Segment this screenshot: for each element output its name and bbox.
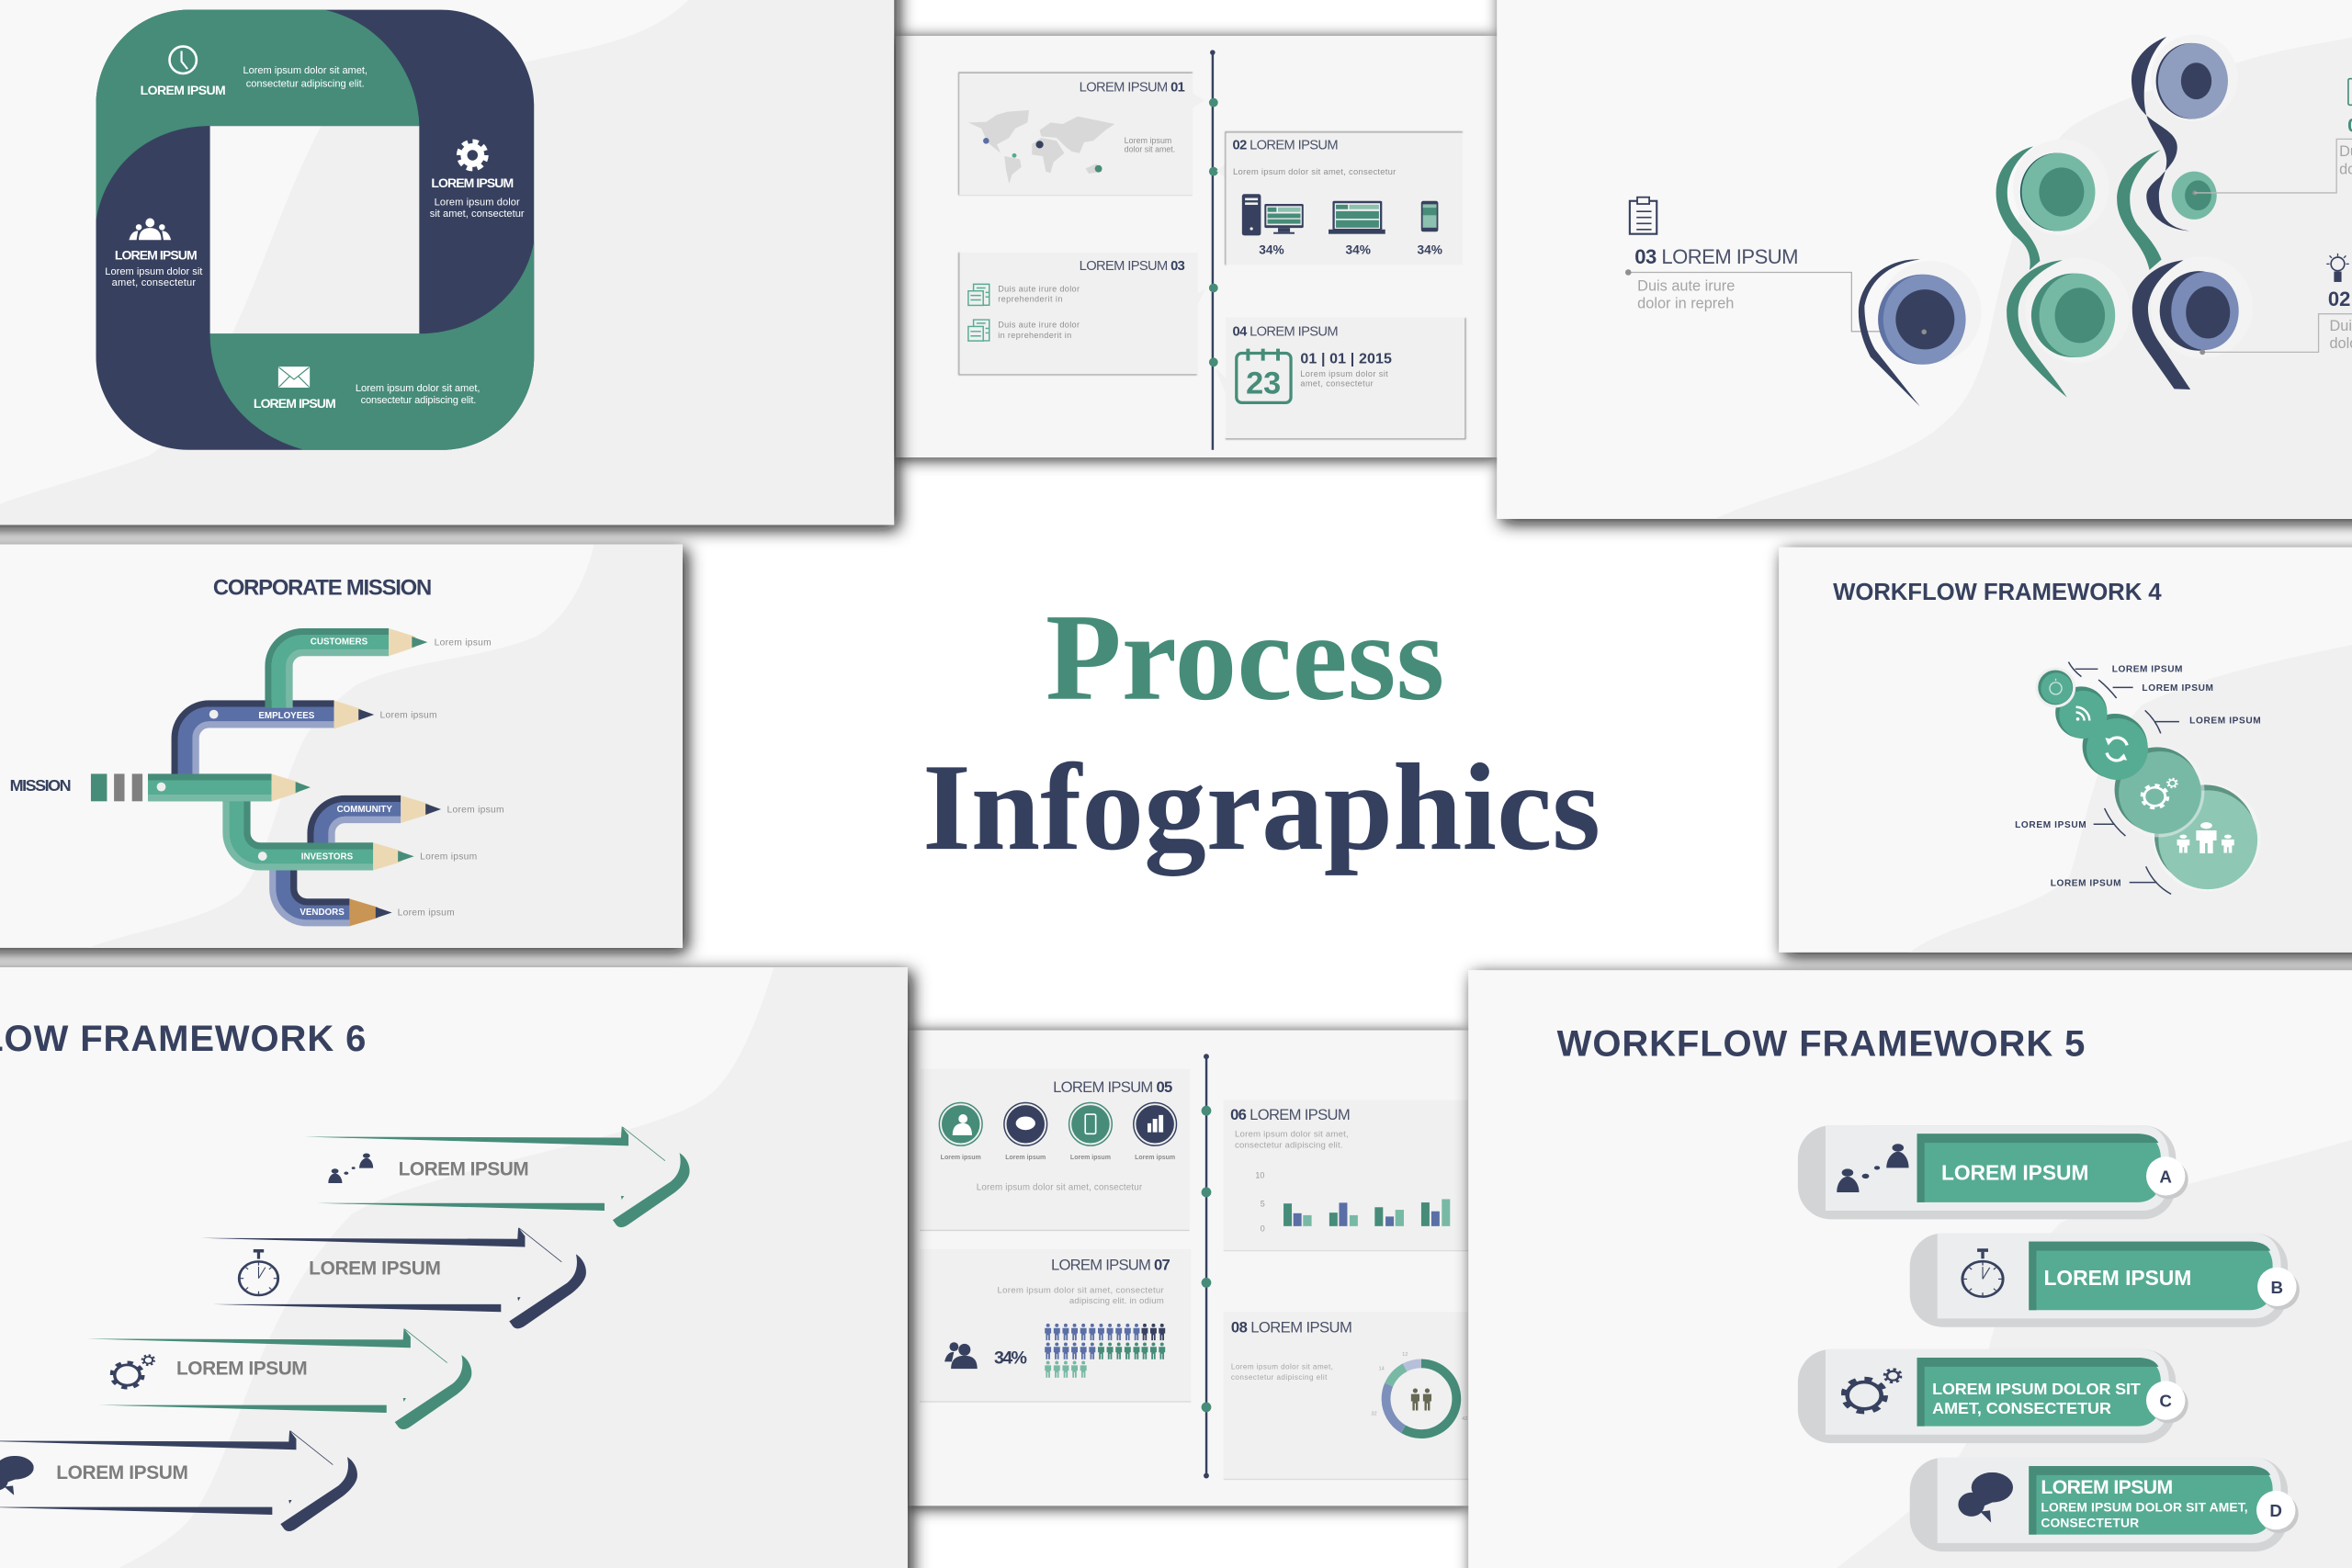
bar chart: 0 <box>1261 1224 1265 1233</box>
panel: map pins slide: 03 LOREM IPSUM <box>1634 245 1799 268</box>
chain of circles <box>2035 667 2261 891</box>
icon: clock <box>170 47 197 73</box>
card 04: amet, consectetur <box>1300 378 1374 388</box>
card 08: consectetur adipiscing elit <box>1231 1373 1328 1382</box>
card 07 <box>920 1249 1191 1402</box>
bar chart: 5 <box>1261 1199 1265 1208</box>
card 03: reprehenderit in <box>998 294 1062 303</box>
donut chart: 32 <box>1371 1411 1377 1416</box>
icon: gears <box>1843 1370 1901 1412</box>
panel: workflow framework 6 <box>0 967 908 1568</box>
card 05: Lorem ipsum <box>941 1155 981 1161</box>
card 04 <box>1215 318 1465 439</box>
card 06: Lorem ipsum dolor sit amet, <box>1235 1130 1349 1140</box>
pill A: LOREM IPSUM <box>1941 1161 2088 1185</box>
bar chart: 10 <box>1255 1170 1264 1179</box>
card 08: Lorem ipsum dolor sit amet, <box>1231 1363 1333 1371</box>
icon: clipboard <box>1630 197 1657 234</box>
pencil: vendors: VENDORS <box>300 908 345 918</box>
panel: map pins slide: dolor in repreh <box>1637 296 1734 312</box>
donut chart: 42 <box>1462 1416 1467 1422</box>
pill A <box>1798 1125 2188 1219</box>
icon: stopwatch outline <box>2050 679 2062 694</box>
pill B <box>1910 1234 2300 1327</box>
icon: phone <box>1421 201 1438 231</box>
pill C: AMET, CONSECTETUR <box>1932 1399 2111 1417</box>
pencil: employees: Lorem ipsum <box>380 711 437 721</box>
icon: people pair <box>944 1342 978 1369</box>
panel: ring diagram slide: Lorem ipsum dolor sit amet, <box>356 383 480 394</box>
pencil: investors <box>226 798 477 870</box>
pencil: customers: CUSTOMERS <box>311 637 368 648</box>
pill C: LOREM IPSUM DOLOR SIT <box>1932 1380 2141 1398</box>
panel: ring diagram slide: consectetur adipiscing elit. <box>246 79 365 90</box>
pencil: customers <box>268 628 492 708</box>
card 02: 02 LOREM IPSUM <box>1233 139 1339 153</box>
title: WORKFLOW FRAMEWORK 4 <box>1833 580 2162 605</box>
leader marks and labels <box>2068 662 2179 894</box>
main title: Process <box>1046 589 1444 727</box>
panel: ring diagram slide: sit amet, consectetur <box>430 209 525 220</box>
icon: speech bubbles <box>0 1456 34 1495</box>
card 05: Lorem ipsum <box>1135 1155 1175 1161</box>
panel: timeline slide 01-04 <box>896 36 1497 457</box>
panel: workflow framework 4: LOREM IPSUM <box>2051 879 2121 889</box>
map pin upper green <box>1996 140 2109 270</box>
card 01: LOREM IPSUM 01 <box>1080 81 1185 96</box>
title: WORKFLOW FRAMEWORK 5 <box>1557 1023 2085 1064</box>
card 07: 34% <box>994 1348 1027 1368</box>
pill D: LOREM IPSUM DOLOR SIT AMET, <box>2041 1500 2248 1515</box>
card 01: Lorem ipsum <box>1125 136 1171 145</box>
card 06: 06 LOREM IPSUM <box>1230 1106 1351 1123</box>
panel: ring diagram slide: Lorem ipsum dolor sit amet, <box>243 65 368 76</box>
donut chart: 12 <box>1402 1352 1408 1358</box>
card 07: Lorem ipsum dolor sit amet, consectetur <box>998 1285 1165 1295</box>
pencil: investors: Lorem ipsum <box>420 852 477 862</box>
icon: gear <box>458 141 486 169</box>
arrow 1: LOREM IPSUM <box>399 1158 529 1179</box>
card 05: LOREM IPSUM 05 <box>1053 1078 1172 1096</box>
card 02: 34% <box>1418 243 1442 257</box>
pencil: employees: EMPLOYEES <box>258 711 315 721</box>
bar chart <box>1255 1170 1450 1233</box>
panel: ring diagram slide: amet, consectetur <box>112 277 196 288</box>
label: mission: MISSION <box>10 776 72 795</box>
timeline axis <box>1209 50 1218 450</box>
panel: ring diagram slide: Lorem ipsum dolor sit <box>105 266 202 277</box>
panel: corporate mission <box>0 545 683 948</box>
main title: Infographics <box>922 739 1600 876</box>
card 08: 08 LOREM IPSUM <box>1231 1318 1352 1336</box>
leader lines and cropped right labels <box>2195 79 2352 355</box>
panel: workflow framework 5 <box>1468 970 2352 1568</box>
panel: map pins slide: Duis aute irure <box>1637 278 1735 295</box>
pictogram chart <box>1045 1324 1165 1378</box>
panel: ring diagram slide: LOREM IPSUM <box>141 83 226 97</box>
arrow 2 <box>201 1227 586 1328</box>
world map <box>968 110 1114 184</box>
card 01: dolor sit amet. <box>1125 145 1175 154</box>
panel: workflow framework 4: LOREM IPSUM <box>2112 664 2182 674</box>
panel: ring diagram slide: Lorem ipsum dolor <box>435 197 520 209</box>
pencil: vendors: Lorem ipsum <box>398 908 455 918</box>
card 03 <box>959 253 1206 375</box>
pencil: community: COMMUNITY <box>337 805 392 815</box>
pencil: community: Lorem ipsum <box>447 806 504 816</box>
pill D: D <box>2269 1501 2282 1520</box>
card 06: consectetur adipiscing elit. <box>1235 1140 1343 1150</box>
card 03: LOREM IPSUM 03 <box>1080 259 1185 274</box>
pill C: C <box>2159 1391 2172 1410</box>
donut chart <box>1371 1352 1467 1434</box>
icon: people steps <box>1837 1144 1909 1192</box>
pencil: mission main <box>91 773 311 801</box>
icon circles <box>939 1102 1176 1145</box>
icon: people steps <box>328 1153 373 1183</box>
map pin lower green <box>2007 258 2130 398</box>
card 08 <box>1224 1312 1468 1479</box>
card 07: adipiscing elit. in odium <box>1069 1296 1164 1306</box>
map pin top navy <box>2132 35 2238 231</box>
panel: ring diagram slide: consectetur adipiscing elit. <box>361 395 476 406</box>
icon: family <box>2177 822 2234 853</box>
icon: stopwatch <box>239 1249 278 1295</box>
panel: ring diagram slide: LOREM IPSUM <box>431 175 514 190</box>
map pin small green <box>2117 150 2217 270</box>
card 03: Duis aute irure dolor <box>998 285 1080 294</box>
panel: workflow framework 4: LOREM IPSUM <box>2015 820 2086 830</box>
card 05: Lorem ipsum dolor sit amet, consectetur <box>977 1182 1143 1192</box>
card 04: 01 | 01 | 2015 <box>1300 352 1392 367</box>
pill B: LOREM IPSUM <box>2043 1266 2191 1290</box>
title: CORPORATE MISSION <box>213 575 432 600</box>
panel: workflow framework 4: LOREM IPSUM <box>2142 683 2213 694</box>
pencil: employees <box>175 700 437 773</box>
icon: refresh <box>2105 738 2127 761</box>
card 02: 34% <box>1345 243 1371 257</box>
card 03: in reprehenderit in <box>998 331 1071 340</box>
card 02 <box>1216 132 1463 265</box>
rounded square ring <box>96 10 534 450</box>
icon: speech bubbles <box>1958 1472 2013 1522</box>
icon: calendar <box>1237 349 1291 402</box>
card 05 <box>920 1069 1190 1230</box>
pill A: A <box>2159 1167 2172 1186</box>
leader line: 03 <box>1628 272 1924 332</box>
pencil: community <box>311 795 504 843</box>
panel: ring diagram slide: LOREM IPSUM <box>115 247 198 262</box>
arrow 4: LOREM IPSUM <box>56 1462 188 1483</box>
pill D: CONSECTETUR <box>2041 1516 2139 1530</box>
pill C <box>1798 1349 2188 1443</box>
pencil: customers: Lorem ipsum <box>435 638 492 649</box>
card 02: 34% <box>1259 243 1284 257</box>
icon: calendar: 23 <box>1246 367 1281 401</box>
pencil: vendors <box>273 867 455 926</box>
icon: wifi <box>2076 707 2089 721</box>
panel: ring diagram slide <box>0 0 894 525</box>
panel: workflow framework 4 <box>1779 547 2352 953</box>
arrow 3: LOREM IPSUM <box>176 1358 308 1379</box>
card 05: Lorem ipsum <box>1005 1155 1046 1161</box>
main title <box>922 589 1600 876</box>
icon: envelope <box>278 367 310 388</box>
icon: laptop <box>1329 201 1385 234</box>
timeline axis <box>1202 1054 1211 1478</box>
leader lines and cropped right labels: 02 <box>2328 288 2350 310</box>
icon: desktop computer <box>1242 194 1304 235</box>
card 04: Lorem ipsum dolor sit <box>1300 369 1388 378</box>
card 01 <box>958 73 1204 196</box>
card 04: 04 LOREM IPSUM <box>1233 325 1339 340</box>
panel: timeline slide 05-08 <box>909 1031 1468 1506</box>
pill D: LOREM IPSUM <box>2041 1477 2173 1498</box>
icon: gears <box>2142 779 2177 808</box>
card 07: LOREM IPSUM 07 <box>1051 1257 1170 1274</box>
arrow 3 <box>86 1328 471 1429</box>
arrow 1 <box>304 1126 690 1227</box>
card 06 <box>1224 1100 1468 1251</box>
donut chart: 14 <box>1378 1366 1385 1371</box>
card 02: Lorem ipsum dolor sit amet, consectetur <box>1233 167 1396 177</box>
icon: people <box>129 219 171 240</box>
panel: workflow framework 4: LOREM IPSUM <box>2189 716 2261 726</box>
icon: gears <box>111 1355 154 1388</box>
pill B: B <box>2271 1278 2283 1297</box>
panel: map pins slide <box>1497 0 2352 519</box>
map pin lower navy <box>2132 256 2253 389</box>
map pin 03 <box>1859 259 1982 406</box>
card 05: Lorem ipsum <box>1070 1155 1111 1161</box>
pill D <box>1910 1458 2299 1551</box>
icon: stopwatch <box>1962 1248 2003 1297</box>
panel: ring diagram slide: LOREM IPSUM <box>254 396 336 411</box>
arrow 2: LOREM IPSUM <box>309 1258 441 1280</box>
pencil: investors: INVESTORS <box>301 852 354 862</box>
arrow 4 <box>0 1430 357 1531</box>
card 03: Duis aute irure dolor <box>998 321 1080 330</box>
